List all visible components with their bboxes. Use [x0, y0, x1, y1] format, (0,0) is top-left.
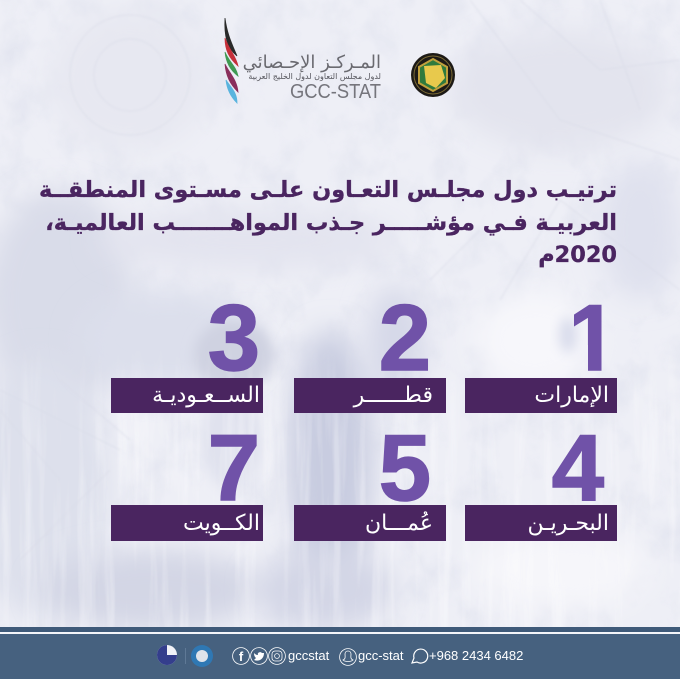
rank 2: Qatar [294, 285, 446, 413]
title: ترتيـب دول مجلـس التعـاون علـى مسـتوى المنطقــة [39, 177, 617, 203]
rank 1: UAE [465, 304, 617, 413]
rank 7: Kuwait [111, 415, 263, 541]
logo subtitle: لدول مجلس التعاون لدول الخليج العربية [248, 72, 381, 81]
handle: gccstat: gccstat [288, 648, 330, 663]
icon: instagram [269, 648, 285, 664]
handle: gcc-stat: gcc-stat [358, 648, 404, 663]
icon: facebook [233, 648, 249, 664]
rank 3: Saudi Arabia: الســعـوديـة [152, 383, 260, 408]
logo: GCC-STAT [225, 18, 381, 103]
rank 4: Bahrain: البحـريـن [527, 511, 609, 536]
logo ribbon [225, 18, 238, 103]
rank 7: Kuwait: 7 [208, 415, 260, 520]
icon: whatsapp [412, 649, 428, 663]
logo Arabic name: المـركـز الإحـصائي [243, 52, 381, 73]
icon: snapchat [340, 649, 356, 665]
title [39, 177, 617, 268]
title: 2020م [538, 242, 617, 268]
title: العربيـة فـي مؤشـــــر جـذب المواهـــــــب العالميـة، [45, 210, 617, 236]
footer bar [0, 627, 680, 679]
rank 2: Qatar: 2 [379, 285, 431, 390]
rank 3: Saudi Arabia [111, 285, 263, 413]
rank 2: Qatar: قطــــــر [353, 383, 433, 408]
rank 1: UAE: 1 [567, 285, 619, 390]
icon: facebook: f [239, 649, 244, 664]
icon: twitter [251, 648, 267, 664]
phone number: +968 2434 6482 [429, 648, 523, 663]
GCC emblem [411, 53, 455, 97]
rank 4: Bahrain [465, 415, 617, 541]
rank 3: Saudi Arabia: 3 [208, 285, 260, 390]
rank 5: Oman [294, 415, 446, 541]
icon: TUV badge [191, 645, 213, 667]
rank 5: Oman: عُمـــان [365, 511, 433, 536]
rank 1: UAE: الإمارات [534, 383, 609, 408]
logo English name: GCC-STAT [290, 81, 381, 103]
rank 4: Bahrain: 4 [552, 415, 604, 520]
icon: certification badge [157, 645, 186, 665]
rank 5: Oman: 5 [379, 415, 431, 520]
rank 7: Kuwait: الكــويت [183, 511, 260, 536]
